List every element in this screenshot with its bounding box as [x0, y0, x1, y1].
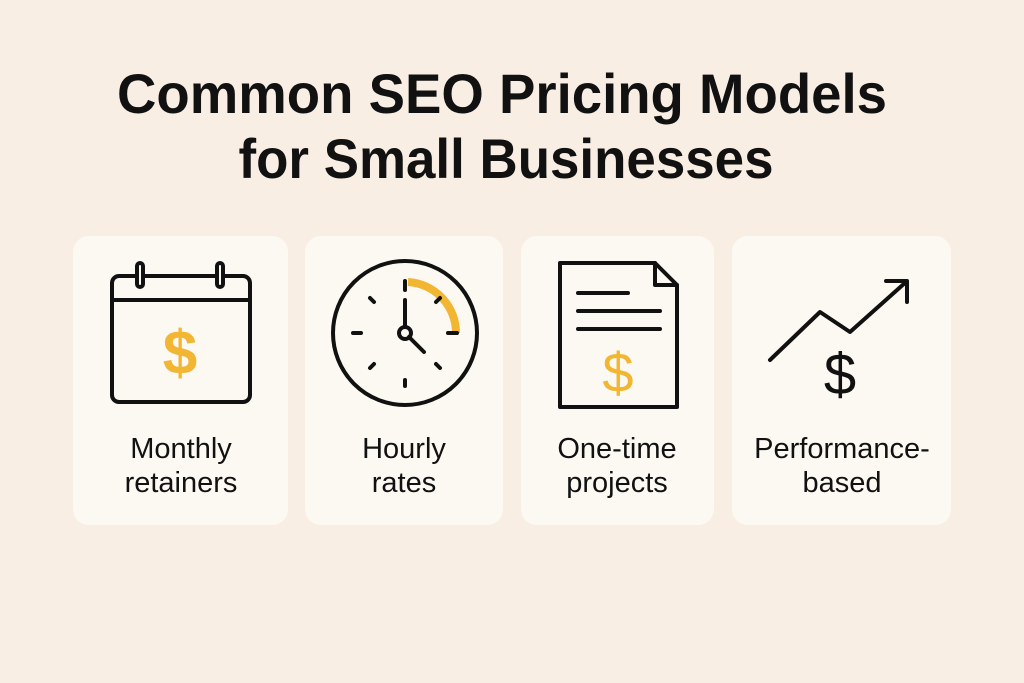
label — [362, 433, 446, 499]
label: Hourly — [362, 433, 446, 465]
panel: hourly rates — [305, 236, 503, 525]
label — [557, 433, 677, 499]
label: rates — [372, 467, 436, 499]
icon: document: $ — [602, 341, 634, 404]
icon: clock — [333, 261, 477, 405]
label: One-time — [557, 433, 677, 465]
title — [117, 62, 887, 190]
icon: document — [560, 263, 677, 407]
icon: calendar — [112, 263, 250, 402]
label — [125, 433, 237, 499]
label: projects — [566, 467, 668, 499]
label: Performance- — [754, 433, 930, 465]
panel: monthly retainers — [73, 236, 288, 525]
title: for Small Businesses — [238, 127, 774, 190]
label: Monthly — [130, 433, 232, 465]
panel: one-time projects — [521, 236, 714, 525]
icon: trend arrow with dollar — [770, 281, 907, 407]
panel: performance-based — [732, 236, 951, 525]
icon: trend arrow with dollar: $ — [824, 342, 856, 407]
title: Common SEO Pricing Models — [117, 62, 887, 125]
label: based — [802, 467, 882, 499]
label: retainers — [125, 467, 237, 499]
icon: calendar: $ — [163, 319, 197, 388]
label — [754, 433, 930, 499]
